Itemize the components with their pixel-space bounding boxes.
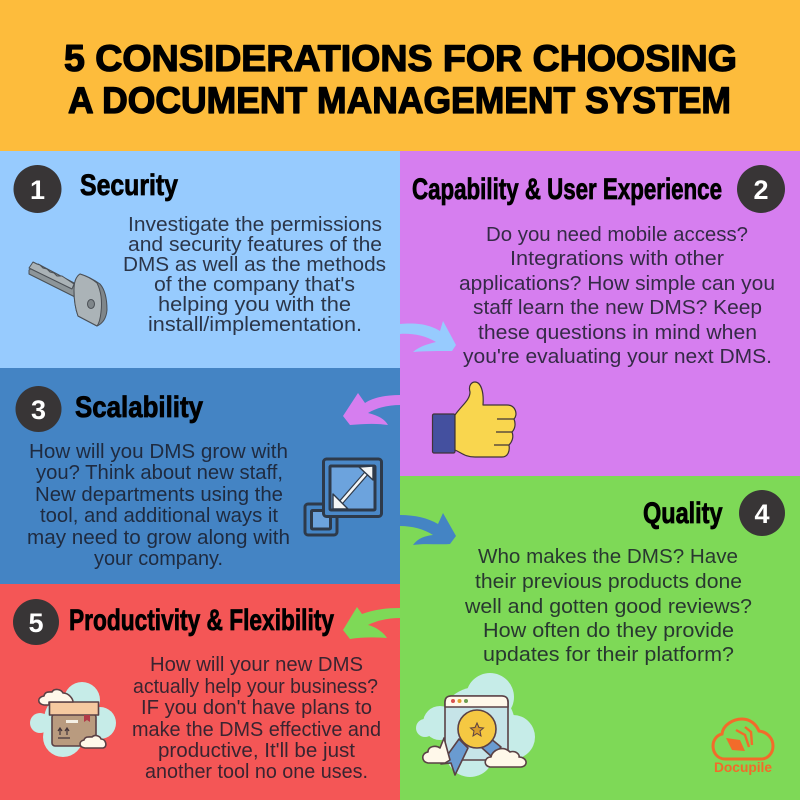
panel: security: [0, 151, 400, 368]
arrow: scalability to quality: [400, 513, 456, 545]
body text: productivity: another tool no one uses.: [145, 761, 368, 783]
number badge 3: [16, 386, 62, 432]
arrow: security to capability: [400, 321, 456, 352]
number badge 1: 1: [30, 175, 45, 205]
title: 5 CONSIDERATIONS FOR CHOOSING: [64, 38, 737, 79]
body text: quality: [464, 546, 752, 666]
number badge 2: [737, 165, 785, 213]
body text: security: install/implementation.: [148, 314, 362, 336]
arrow: quality to productivity: [343, 607, 400, 639]
logo: Docupile: [713, 719, 773, 775]
heading: security: Security: [80, 169, 178, 202]
icon: key: [29, 262, 107, 326]
body text: productivity: productive, It'll be just: [158, 740, 355, 762]
panel: capability and user experience: [400, 151, 800, 476]
number badge 5: [13, 599, 59, 645]
body text: capability: Do you need mobile access?: [486, 224, 748, 246]
arrow: capability to scalability: [343, 393, 400, 425]
body text: scalability: How will you DMS grow with: [29, 441, 288, 463]
body text: scalability: you? Think about new staff,: [36, 462, 283, 484]
body text: scalability: New departments using the: [35, 484, 283, 506]
body text: scalability: your company.: [94, 548, 223, 570]
body text: scalability: may need to grow along with: [27, 527, 290, 549]
panel: quality: [400, 476, 800, 800]
number badge 4: [739, 490, 785, 536]
body text: productivity: make the DMS effective and: [132, 719, 381, 741]
body text: quality: Who makes the DMS? Have: [478, 546, 738, 568]
body text: scalability: tool, and additional ways it: [40, 505, 278, 527]
body text: security: helping you with the: [158, 294, 351, 316]
number badge 4: 4: [754, 499, 770, 529]
body text: quality: updates for their platform?: [483, 644, 734, 666]
body text: security: DMS as well as the methods: [123, 254, 386, 276]
heading: scalability: Scalability: [75, 391, 203, 424]
number badge 2: 2: [753, 175, 769, 205]
body text: security: Investigate the permissions: [128, 214, 382, 236]
panel: productivity and flexibility: [0, 584, 400, 800]
header band: [0, 0, 800, 151]
logo: Docupile: Docupile: [714, 760, 772, 775]
heading: productivity and flexibility: Productivity & Flexibility: [69, 604, 334, 637]
icon: award medal on browser window: [416, 673, 535, 777]
number badge 5: 5: [28, 608, 44, 638]
number badge 3: 3: [31, 395, 46, 425]
heading: quality: Quality: [643, 497, 723, 530]
body text: productivity: actually help your business?: [133, 676, 378, 698]
icon: resize squares: [305, 459, 382, 535]
icon: cardboard box: [30, 682, 116, 757]
title: A DOCUMENT MANAGEMENT SYSTEM: [68, 80, 731, 121]
body text: security: and security features of the: [128, 234, 382, 256]
body text: capability: staff learn the new DMS? Keep: [473, 297, 762, 319]
number badge 1: [14, 165, 62, 213]
body text: scalability: [27, 441, 290, 570]
body text: capability: you're evaluating your next DMS.: [463, 346, 772, 368]
body text: capability: [459, 224, 775, 368]
icon: thumbs up: [432, 382, 516, 457]
body text: security: [123, 214, 386, 336]
title: [64, 38, 737, 121]
body text: capability: these questions in mind when: [478, 322, 757, 344]
body text: quality: their previous products done: [475, 571, 742, 593]
body text: capability: applications? How simple can you: [459, 273, 775, 295]
body text: productivity: [132, 654, 381, 783]
panel: scalability: [0, 368, 400, 584]
body text: quality: How often do they provide: [483, 620, 734, 642]
body text: productivity: How will your new DMS: [150, 654, 363, 676]
body text: capability: Integrations with other: [510, 248, 724, 270]
body text: quality: well and gotten good reviews?: [464, 596, 752, 618]
body text: security: of the company that's: [154, 274, 355, 296]
body text: productivity: IF you don't have plans to: [141, 697, 372, 719]
